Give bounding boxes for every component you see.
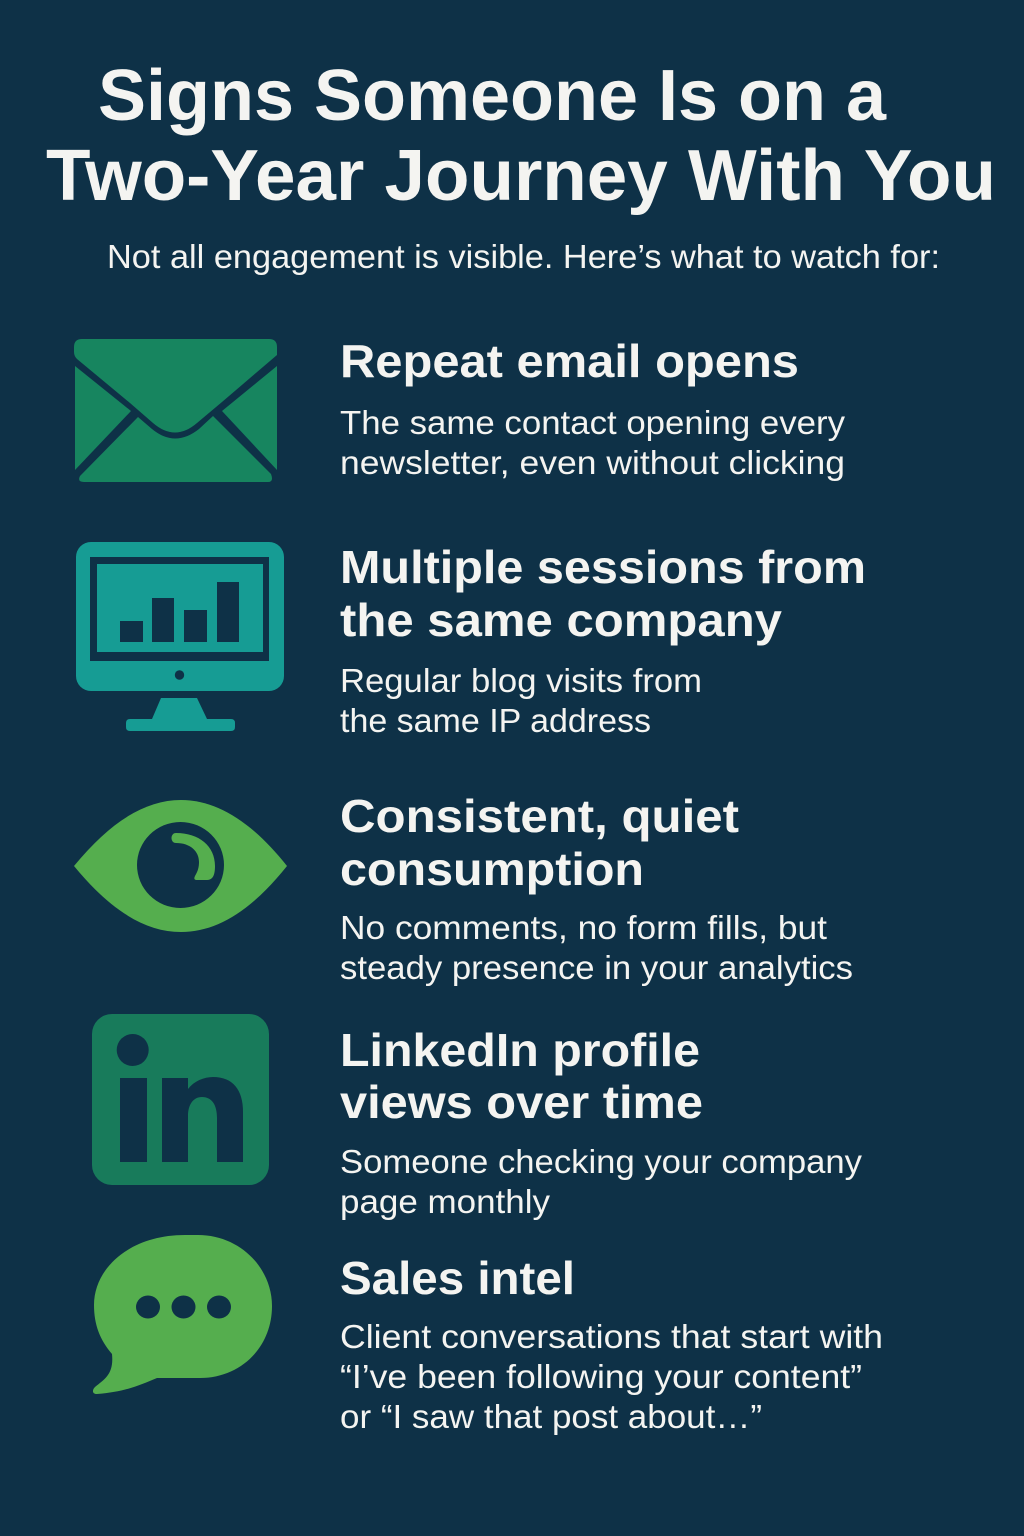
heading: multiple sessions: the same company bbox=[340, 594, 782, 646]
description: repeat email opens: The same contact opening every bbox=[340, 404, 846, 441]
title bbox=[46, 56, 996, 216]
heading: linkedin views bbox=[340, 1024, 703, 1128]
title: Two-Year Journey With You bbox=[46, 136, 996, 216]
heading: linkedin views: views over time bbox=[340, 1076, 703, 1128]
panel: sales intel bbox=[93, 1235, 883, 1435]
description: multiple sessions: Regular blog visits from bbox=[340, 662, 702, 699]
heading: sales intel: Sales intel bbox=[340, 1252, 575, 1304]
description: sales intel: “I’ve been following your content” bbox=[340, 1358, 862, 1395]
heading: multiple sessions bbox=[340, 541, 866, 646]
panel: repeat email opens bbox=[74, 335, 846, 482]
description: linkedin views bbox=[340, 1143, 863, 1220]
icon: monitor with bar chart bbox=[76, 542, 284, 731]
description: sales intel: or “I saw that post about…” bbox=[340, 1398, 762, 1435]
description: linkedin views: Someone checking your company bbox=[340, 1143, 863, 1180]
panel: quiet consumption bbox=[74, 790, 853, 986]
description: sales intel: Client conversations that start with bbox=[340, 1318, 883, 1355]
panel: linkedin views bbox=[92, 1014, 863, 1220]
heading: repeat email opens: Repeat email opens bbox=[340, 335, 799, 387]
description: sales intel bbox=[340, 1318, 883, 1435]
icon: envelope bbox=[74, 339, 277, 482]
panel: multiple sessions bbox=[76, 541, 866, 739]
title: Signs Someone Is on a bbox=[98, 56, 887, 136]
description: multiple sessions bbox=[340, 662, 702, 739]
icon: linkedin bbox=[92, 1014, 269, 1185]
description: repeat email opens: newsletter, even without clicking bbox=[340, 444, 845, 481]
description: quiet consumption: No comments, no form fills, but bbox=[340, 909, 827, 946]
description: linkedin views: page monthly bbox=[340, 1183, 551, 1220]
icon: speech bubble bbox=[93, 1235, 272, 1394]
heading: quiet consumption: consumption bbox=[340, 843, 644, 895]
description: quiet consumption bbox=[340, 909, 853, 986]
description: quiet consumption: steady presence in your analytics bbox=[340, 949, 853, 986]
description: repeat email opens bbox=[340, 404, 846, 481]
subtitle: Not all engagement is visible. Here’s what to watch for: bbox=[107, 238, 940, 275]
icon: eye bbox=[74, 800, 287, 932]
heading: multiple sessions: Multiple sessions from bbox=[340, 541, 866, 593]
heading: quiet consumption: Consistent, quiet bbox=[340, 790, 739, 842]
heading: linkedin views: LinkedIn profile bbox=[340, 1024, 700, 1076]
heading: quiet consumption bbox=[340, 790, 739, 895]
description: multiple sessions: the same IP address bbox=[340, 702, 651, 739]
